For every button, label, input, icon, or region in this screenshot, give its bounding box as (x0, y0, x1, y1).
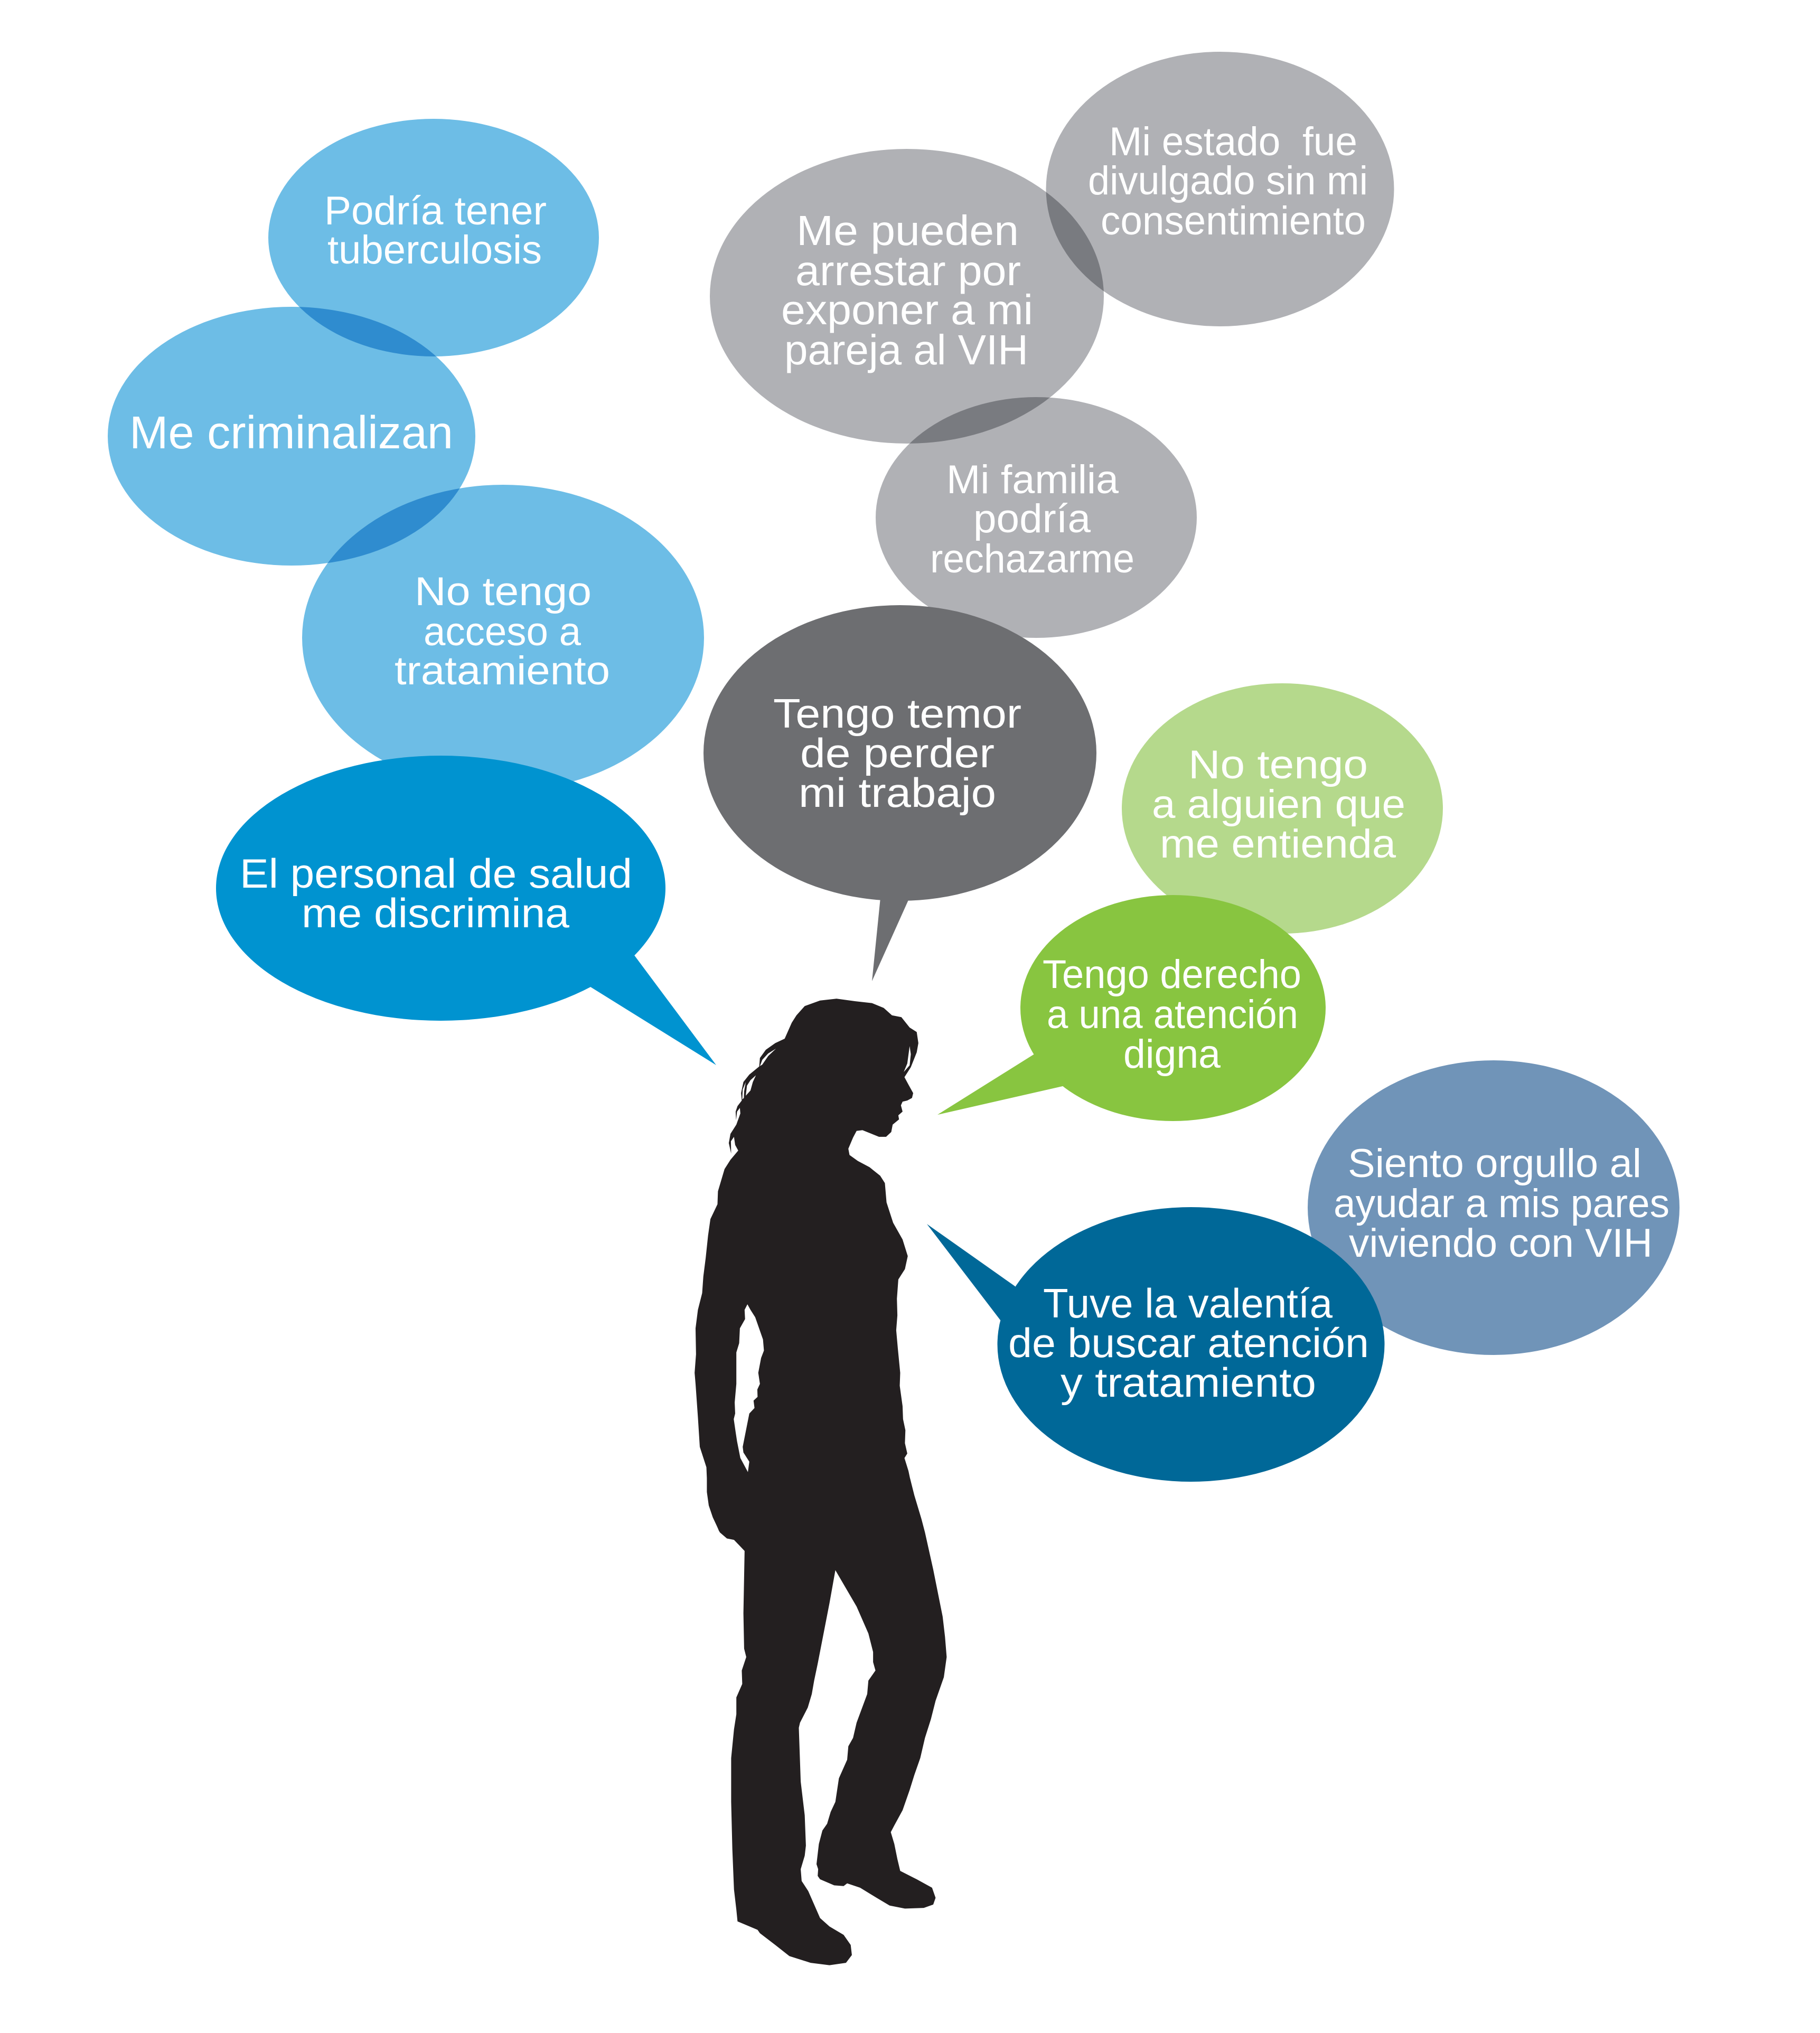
bubble text (240, 850, 632, 936)
speech bubble shape with tail (703, 605, 1096, 981)
speech bubble shape with tail (927, 1207, 1385, 1482)
woman silhouette (695, 999, 946, 1965)
bubble text (930, 457, 1134, 581)
bubble text: Me pueden (796, 207, 1019, 254)
bubble text: Mi familia (946, 457, 1119, 502)
bubble text: divulgado sin mi (1088, 158, 1368, 203)
bubble text: me discrimina (302, 890, 570, 936)
bubble text (1334, 1141, 1669, 1266)
bubble: Siento orgullo al ayudar a mis pares viviendo con VIH (1308, 1060, 1680, 1355)
bubble text: digna (1123, 1032, 1221, 1077)
silhouette: legs and shoes (707, 1479, 946, 1965)
bubble text: me entienda (1160, 822, 1396, 867)
bubble: Tengo derecho a una atención digna (937, 895, 1326, 1121)
bubble text: acceso a (424, 609, 581, 654)
bubble text (781, 207, 1033, 373)
bubble text: pareja al VIH (784, 326, 1028, 373)
bubble text: y tratamiento (1061, 1359, 1316, 1406)
bubble: Mi estado fue divulgado sin mi consentimiento (1046, 52, 1394, 326)
bubble: No tengo a alguien que me entienda (1122, 683, 1443, 934)
bubble text: consentimiento (1101, 199, 1366, 243)
bubble: Podría tener tuberculosis (268, 119, 599, 356)
ellipse shape (108, 307, 475, 566)
bubble text (1088, 119, 1368, 243)
ellipse shape (710, 149, 1104, 444)
bubble text: de perder (800, 730, 995, 776)
bubble: No tengo acceso a tratamiento (302, 485, 704, 791)
bubble text: Siento orgullo al (1348, 1141, 1641, 1186)
bubble text: El personal de salud (240, 850, 632, 897)
bubble text: Podría tener (324, 189, 547, 233)
bubble text (1008, 1280, 1369, 1406)
bubble: Tuve la valentía de buscar atención y tratamiento (927, 1207, 1385, 1482)
bubble text: Tengo derecho (1043, 952, 1301, 997)
bubble text: de buscar atención (1008, 1320, 1369, 1366)
bubble: Me pueden arrestar por exponer a mi pareja al VIH (710, 149, 1104, 444)
bubble text: No tengo (1188, 742, 1368, 787)
bubble: Me criminalizan (108, 307, 475, 566)
bubble text: Tengo temor (773, 690, 1021, 737)
ellipse shape (1046, 52, 1394, 326)
bubble text (1152, 742, 1405, 867)
bubble text: No tengo (415, 569, 592, 614)
bubble: Tengo temor de perder mi trabajo (703, 605, 1096, 981)
speech bubble shape with tail (937, 895, 1326, 1121)
ellipse shape (302, 485, 704, 791)
bubble text: Tuve la valentía (1043, 1280, 1333, 1326)
bubble text: podría (973, 496, 1091, 541)
bubble text (1043, 952, 1301, 1077)
ellipse shape (1122, 683, 1443, 934)
ellipse shape (1308, 1060, 1680, 1355)
bubble text (324, 189, 547, 272)
bubble text (395, 569, 610, 693)
bubble text: tuberculosis (327, 228, 542, 272)
bubble text: viviendo con VIH (1349, 1221, 1653, 1266)
bubble text: Mi estado fue (1109, 119, 1357, 164)
bubble text: a una atención (1047, 992, 1298, 1037)
silhouette: head, torso and arm (695, 999, 924, 1531)
ellipse shape (268, 119, 599, 356)
bubble text: tratamiento (395, 648, 610, 693)
bubble text: ayudar a mis pares (1334, 1181, 1669, 1226)
bubble text: mi trabajo (799, 769, 996, 816)
bubble: Mi familia podría rechazarme (876, 397, 1197, 638)
bubble: El personal de salud me discrimina (216, 756, 716, 1065)
speech bubble shape with tail (216, 756, 716, 1065)
bubble text: exponer a mi (781, 286, 1033, 333)
bubble text: rechazarme (930, 537, 1134, 581)
bubble text: Me criminalizan (129, 407, 453, 458)
bubble text (773, 690, 1021, 816)
bubble text: a alguien que (1152, 782, 1405, 827)
ellipse shape (876, 397, 1197, 638)
bubble text: arrestar por (795, 247, 1021, 294)
